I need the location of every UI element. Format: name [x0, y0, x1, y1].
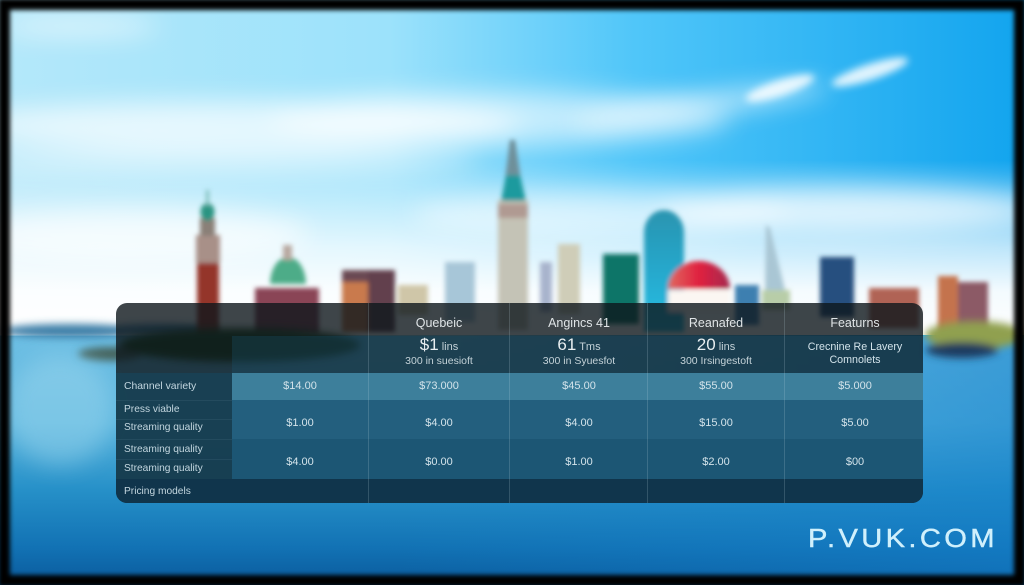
plan: Reanafed: 20 lins: [697, 335, 735, 354]
plan: Featurns: [808, 341, 902, 366]
panel: pricing comparison table: [116, 303, 923, 503]
plan: Featurns: Crecnine Re Lavery: [808, 341, 902, 353]
plan: Quebeic: [405, 335, 473, 367]
row band: channel variety: [232, 373, 923, 400]
row label: Press viable: Press viable: [124, 404, 180, 415]
water glow right: [400, 336, 1024, 585]
heading: Featurns: Featurns: [830, 316, 880, 330]
clouds: [0, 16, 1024, 261]
heading: Angincs 41: Angincs 41: [548, 316, 610, 330]
row label: Channel variety: Channel variety: [124, 381, 196, 392]
row values: channel variety: $5.000: [838, 380, 872, 392]
row values: group two: $4.00: [286, 456, 314, 468]
row values: group two: $1.00: [565, 456, 593, 468]
heading: Quebeic: Quebeic: [416, 316, 462, 330]
row values: group two: $2.00: [702, 456, 730, 468]
plan: Reanafed: [680, 335, 752, 367]
row values: group one: $15.00: [699, 417, 733, 429]
plan: Reanafed: 300 Irsingestoft: [680, 355, 752, 367]
row band: streaming group two: [232, 439, 923, 479]
subheader band: [232, 336, 923, 373]
row values: channel variety: [283, 380, 872, 392]
plan: Angincs 41: 61 Tms: [557, 335, 601, 354]
row values: group one: $1.00: [286, 417, 314, 429]
row values: group two: $0.00: [425, 456, 453, 468]
row label: Streaming quality: Streaming quality: [124, 444, 203, 455]
shoreline: [78, 321, 1024, 362]
row label: Streaming quality: Streaming quality: [124, 422, 203, 433]
row label: Pricing models: Pricing models: [124, 486, 191, 497]
row values: channel variety: $55.00: [699, 380, 733, 392]
heading: Reanafed: Reanafed: [689, 316, 743, 330]
first column shade: [116, 373, 232, 479]
row values: group one: $5.00: [841, 417, 869, 429]
row values: channel variety: $14.00: [283, 380, 317, 392]
skyline: [196, 140, 988, 342]
watermark: P.VUK.COM: [808, 523, 998, 553]
row values: group one: $4.00: [425, 417, 453, 429]
row values: group one: [286, 417, 869, 429]
row values: group two: [286, 456, 864, 468]
plan: Angincs 41: 300 in Syuesfot: [543, 355, 615, 367]
plan: Quebeic: $1 lins: [420, 335, 458, 354]
row values: channel variety: $73.000: [419, 380, 459, 392]
cirrus streak: [743, 52, 911, 107]
row label: Streaming quality: Streaming quality: [124, 463, 203, 474]
water glow left: [5, 355, 115, 465]
row values: channel variety: $45.00: [562, 380, 596, 392]
distant hills: [0, 324, 220, 338]
row values: group two: $00: [846, 456, 864, 468]
row values: group one: $4.00: [565, 417, 593, 429]
plan: Quebeic: 300 in suesioft: [405, 355, 473, 367]
plan: Featurns: Comnolets: [829, 354, 881, 366]
footer band: [116, 479, 923, 503]
plan: Angincs 41: [543, 335, 616, 367]
row band: streaming group one: [232, 400, 923, 439]
